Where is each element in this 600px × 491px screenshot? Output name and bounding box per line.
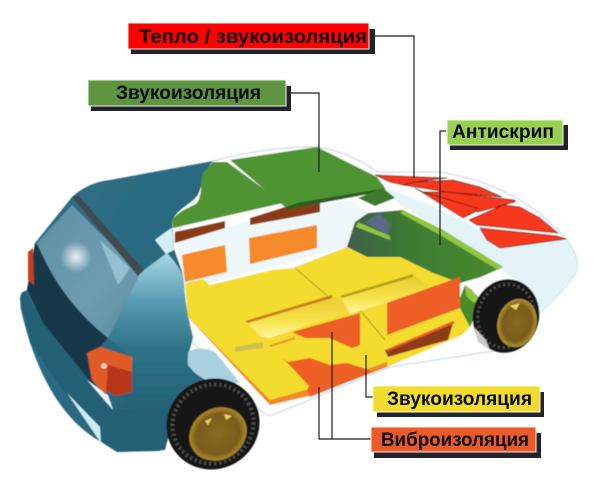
front heat panels xyxy=(375,175,566,248)
label: anti-squeak xyxy=(447,120,568,150)
roof panels xyxy=(172,147,385,243)
label: vibration insulation xyxy=(371,427,541,458)
label: heat and sound insulation xyxy=(128,23,375,54)
label: floor sound insulation xyxy=(373,386,544,417)
interior front green xyxy=(347,188,503,332)
front wheel xyxy=(465,272,547,360)
floor and wall tint xyxy=(176,200,368,370)
line: heat insulation xyxy=(375,36,414,178)
label: anti-squeak: Антискрип xyxy=(452,122,554,143)
line: anti-squeak xyxy=(440,131,446,245)
wall sound panels xyxy=(182,225,317,282)
transparent car shell xyxy=(170,147,578,416)
vibration panels xyxy=(283,277,460,397)
line: vibration insulation xyxy=(319,332,371,439)
line: floor sound insulation xyxy=(366,355,373,397)
leader lines xyxy=(291,36,446,439)
tail light xyxy=(87,347,132,396)
line: roof sound insulation xyxy=(291,93,319,172)
brown front panel xyxy=(385,321,455,357)
label: roof sound insulation: Звукоизоляция xyxy=(116,83,261,104)
label: vibration insulation: Виброизоляция xyxy=(381,430,529,451)
label: roof sound insulation xyxy=(88,80,291,111)
rear wheel xyxy=(150,362,276,486)
rear body xyxy=(20,161,240,452)
hood glass tint xyxy=(385,188,578,313)
car illustration xyxy=(20,147,578,486)
label: heat and sound insulation: Тепло / звукоизоляция xyxy=(139,27,367,48)
yellow floor xyxy=(185,247,470,405)
label: floor sound insulation: Звукоизоляция xyxy=(387,389,532,410)
